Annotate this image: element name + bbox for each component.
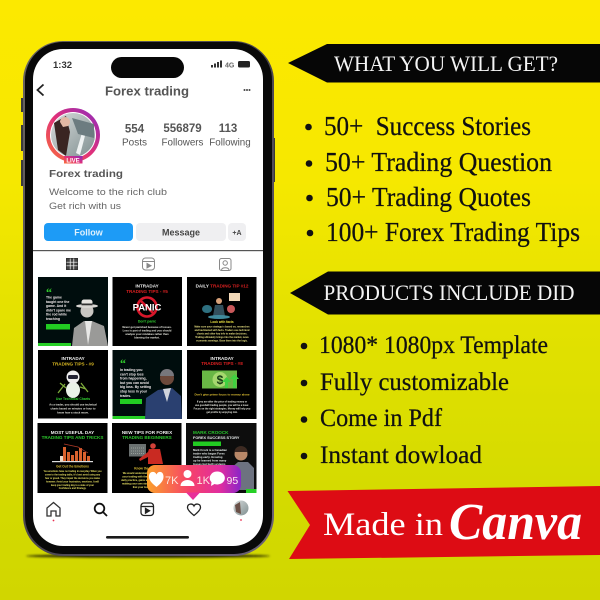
tab: reels icon: [142, 258, 154, 270]
post 3: and backtested with facts. Traders use technical: [195, 329, 250, 332]
status bar: 4G: [225, 62, 235, 70]
post 1: game. And it: [46, 304, 67, 308]
stats: [122, 123, 251, 148]
nav: heart: [188, 504, 200, 516]
post 1: taught one the: [46, 300, 69, 304]
post 3: [187, 277, 256, 346]
stat: posts: [122, 124, 147, 148]
post 6: TRADING TIPS - #8: [201, 361, 243, 366]
icon: heart: [149, 472, 164, 487]
post 7: come to the trading table, it's best avoid using any: [45, 474, 101, 476]
icon: person: [180, 470, 194, 486]
post 5: “: [120, 356, 126, 370]
made in: Made in: [323, 507, 443, 543]
post 5: from happening,: [120, 377, 147, 381]
post 6: INTRADAY: [210, 356, 234, 361]
post 9: trader who began Forex: [193, 452, 225, 456]
stat: posts: 554: [125, 124, 145, 136]
post 3: DAILY TRADING TIP #12: [196, 284, 249, 288]
post 6: If you are after the price of trading money or: [197, 400, 247, 404]
post 7: Get Out the Emotions: [56, 464, 89, 468]
post 7: however. Avoid your frustration, emotions. It will: [46, 480, 99, 484]
post 1: the rod while: [46, 313, 67, 317]
post 1: The game: [46, 296, 62, 300]
post 9: FOREX SUCCESS STORY: [193, 436, 240, 440]
post 6: [187, 350, 256, 419]
post 7: fear or greed. They impair the decisions you make: [45, 477, 101, 480]
live badge: LIVE: [66, 158, 80, 164]
nav: search: [95, 504, 107, 516]
banner: products include: [290, 272, 600, 314]
nav: profile: [234, 500, 248, 521]
post 1: [38, 277, 108, 346]
comments count: 95: [226, 475, 238, 487]
post 6: Don't give prime focus to money alone: [194, 392, 250, 396]
post 8: Know the Market: [134, 466, 161, 470]
dynamic island: [111, 57, 184, 78]
profile name: Forex trading: [49, 168, 123, 180]
stat: posts: Posts: [122, 138, 147, 148]
nav: reels: [141, 503, 154, 516]
status bar: [53, 60, 250, 71]
post 8: [112, 423, 182, 493]
post 4: charts based on minutes or hour to: [50, 406, 96, 410]
banner: what you will get: WHAT YOU WILL GET?: [334, 51, 558, 76]
tab: grid icon: [66, 258, 78, 270]
post 6: use goodwill trading people, you will be a loser.: [195, 404, 249, 407]
post 5: trades.: [120, 394, 131, 398]
header: back arrow: [38, 84, 44, 96]
post 9: up he learned from many: [193, 458, 227, 462]
post 4: [38, 350, 108, 418]
add friend button: +A: [232, 230, 242, 237]
item 1: 50+ Success Stories: [324, 111, 531, 141]
post 3: Trading ultimately brings into the market, news: [195, 336, 249, 339]
post grid: [38, 277, 256, 493]
phone screen: [33, 49, 263, 546]
post 2: [112, 277, 182, 346]
item 2: Fully customizable: [320, 369, 509, 396]
message button: [136, 223, 226, 241]
post 3: Make sure your strategy is based on, researches: [194, 326, 250, 328]
likes count: 7K: [165, 475, 179, 487]
status bar: 1:32: [53, 60, 72, 71]
avatar: [46, 108, 100, 164]
post 8: daily practice, gains and make sure you are: [121, 479, 173, 482]
notification bubble: [147, 465, 241, 500]
post 9: [186, 423, 256, 493]
post 7: keep your trading day to a state of your: [51, 484, 94, 487]
post 9: trading early. Growing: [193, 455, 223, 459]
post 7: Confidence and Strategy.: [59, 487, 87, 490]
post 7: [38, 423, 108, 493]
post 2: INTRADAY: [135, 284, 159, 288]
bottom nav: [47, 500, 248, 521]
stat: following: [209, 123, 251, 148]
follow button: Follow: [74, 228, 104, 238]
item 2: 50+ Trading Question: [325, 147, 552, 177]
post 5: stop loss in your: [120, 390, 148, 394]
post 2: Loss is part of trading and you should: [123, 328, 172, 332]
phone mockup: [21, 41, 275, 558]
phone body: [23, 41, 274, 556]
post 4: TRADING TIPS - #9: [52, 362, 94, 366]
post 4: know how a stock move.: [57, 410, 89, 414]
post 2: analyze your mistakes rather than: [125, 332, 169, 336]
post 8: that your loss are small.: [133, 486, 162, 489]
list: what you will get: [305, 111, 580, 247]
nav: home: [47, 502, 60, 521]
post 3: charts and other key info to make decisions.: [197, 332, 248, 336]
post 4: As a trader, you should use technical: [49, 402, 97, 406]
stat: followers: 556879: [163, 123, 202, 135]
post 5: In trading you: [120, 368, 142, 372]
post 8: NEW TIPS FOR FOREX: [122, 430, 173, 435]
post 5: but you can avoid: [120, 381, 149, 385]
stat: followers: Followers: [162, 138, 204, 148]
divider: [33, 250, 263, 251]
post 1: didn't spare me: [46, 308, 71, 312]
post 2: TRADING TIPS - #5: [126, 289, 168, 294]
tab: tagged icon: [220, 258, 231, 270]
post 7: You emotions have no trading in everyday. When you: [43, 470, 102, 473]
item 3: Come in Pdf: [320, 405, 443, 432]
list: products include: [301, 332, 548, 469]
post 5: [112, 350, 182, 419]
post 9: Mark Crock is a Canadian: [193, 448, 227, 452]
post 8: your trading with the tips. Then trading is: [122, 476, 172, 478]
icon: comment: [210, 471, 225, 486]
header: more dots: [244, 89, 250, 91]
post 3: economic earnings. Base them into the logic.: [196, 340, 248, 342]
post 1: “: [46, 285, 52, 299]
item 4: 100+ Forex Trading Tips: [326, 217, 580, 247]
post 6: Focus on the right strategies. Money will help you: [194, 408, 251, 410]
post 5: can't stop loss: [120, 372, 144, 376]
post 7: TRADING TIPS AND TRICKS: [42, 435, 103, 440]
home indicator: [106, 536, 189, 539]
post 4: Use Technical Charts: [56, 397, 90, 401]
post 9: and coaching for traders: [193, 466, 226, 470]
stat: following: 113: [219, 123, 237, 135]
post 7: MOST USEFUL DAY: [51, 430, 94, 435]
add friend button: [228, 223, 246, 241]
post 4: INTRADAY: [61, 356, 85, 361]
banner: products include: PRODUCTS INCLUDE DID: [324, 280, 574, 305]
ribbon: made in canva: [288, 486, 600, 559]
stat: followers: [162, 123, 204, 148]
message button: Message: [162, 228, 200, 238]
post 6: $: [217, 373, 224, 387]
post 2: Never get panicked because of losses.: [122, 325, 172, 329]
item 3: 50+ Trading Quotes: [326, 182, 531, 212]
header: title: Forex trading: [105, 84, 189, 98]
canva: Canva: [449, 494, 582, 551]
profile bio: Get rich with us: [49, 201, 121, 212]
post 2: PANIC: [133, 302, 162, 314]
post 9: MARK CROOCK: [193, 430, 229, 435]
item 1: 1080* 1080px Template: [319, 332, 548, 359]
post 2: Don't panic: [138, 320, 156, 324]
post 1: teaching: [46, 317, 60, 321]
post 2: blaming the market.: [134, 336, 160, 340]
post 3: Look with facts: [210, 320, 234, 324]
profile bio: Welcome to the rich club: [49, 187, 167, 198]
banner: what you will get: [288, 44, 600, 82]
follow button: [44, 223, 133, 241]
item 4: Instant dowload: [320, 442, 483, 469]
phone side buttons: [21, 98, 275, 186]
profile bio: [49, 187, 167, 212]
post 9: losses but built systems: [193, 462, 226, 466]
phone shadow: [26, 554, 270, 558]
post 8: TRADING BEGINNERS: [122, 435, 172, 440]
post 6: get profits by enjoying risk.: [206, 411, 238, 414]
post 5: big loss. By setting: [120, 385, 151, 389]
stat: following: Following: [209, 138, 251, 148]
post 8: making your own strategy and taking care: [122, 482, 173, 486]
post 8: We would understand the market to start: [123, 472, 171, 475]
followers count: 1K: [196, 475, 211, 487]
